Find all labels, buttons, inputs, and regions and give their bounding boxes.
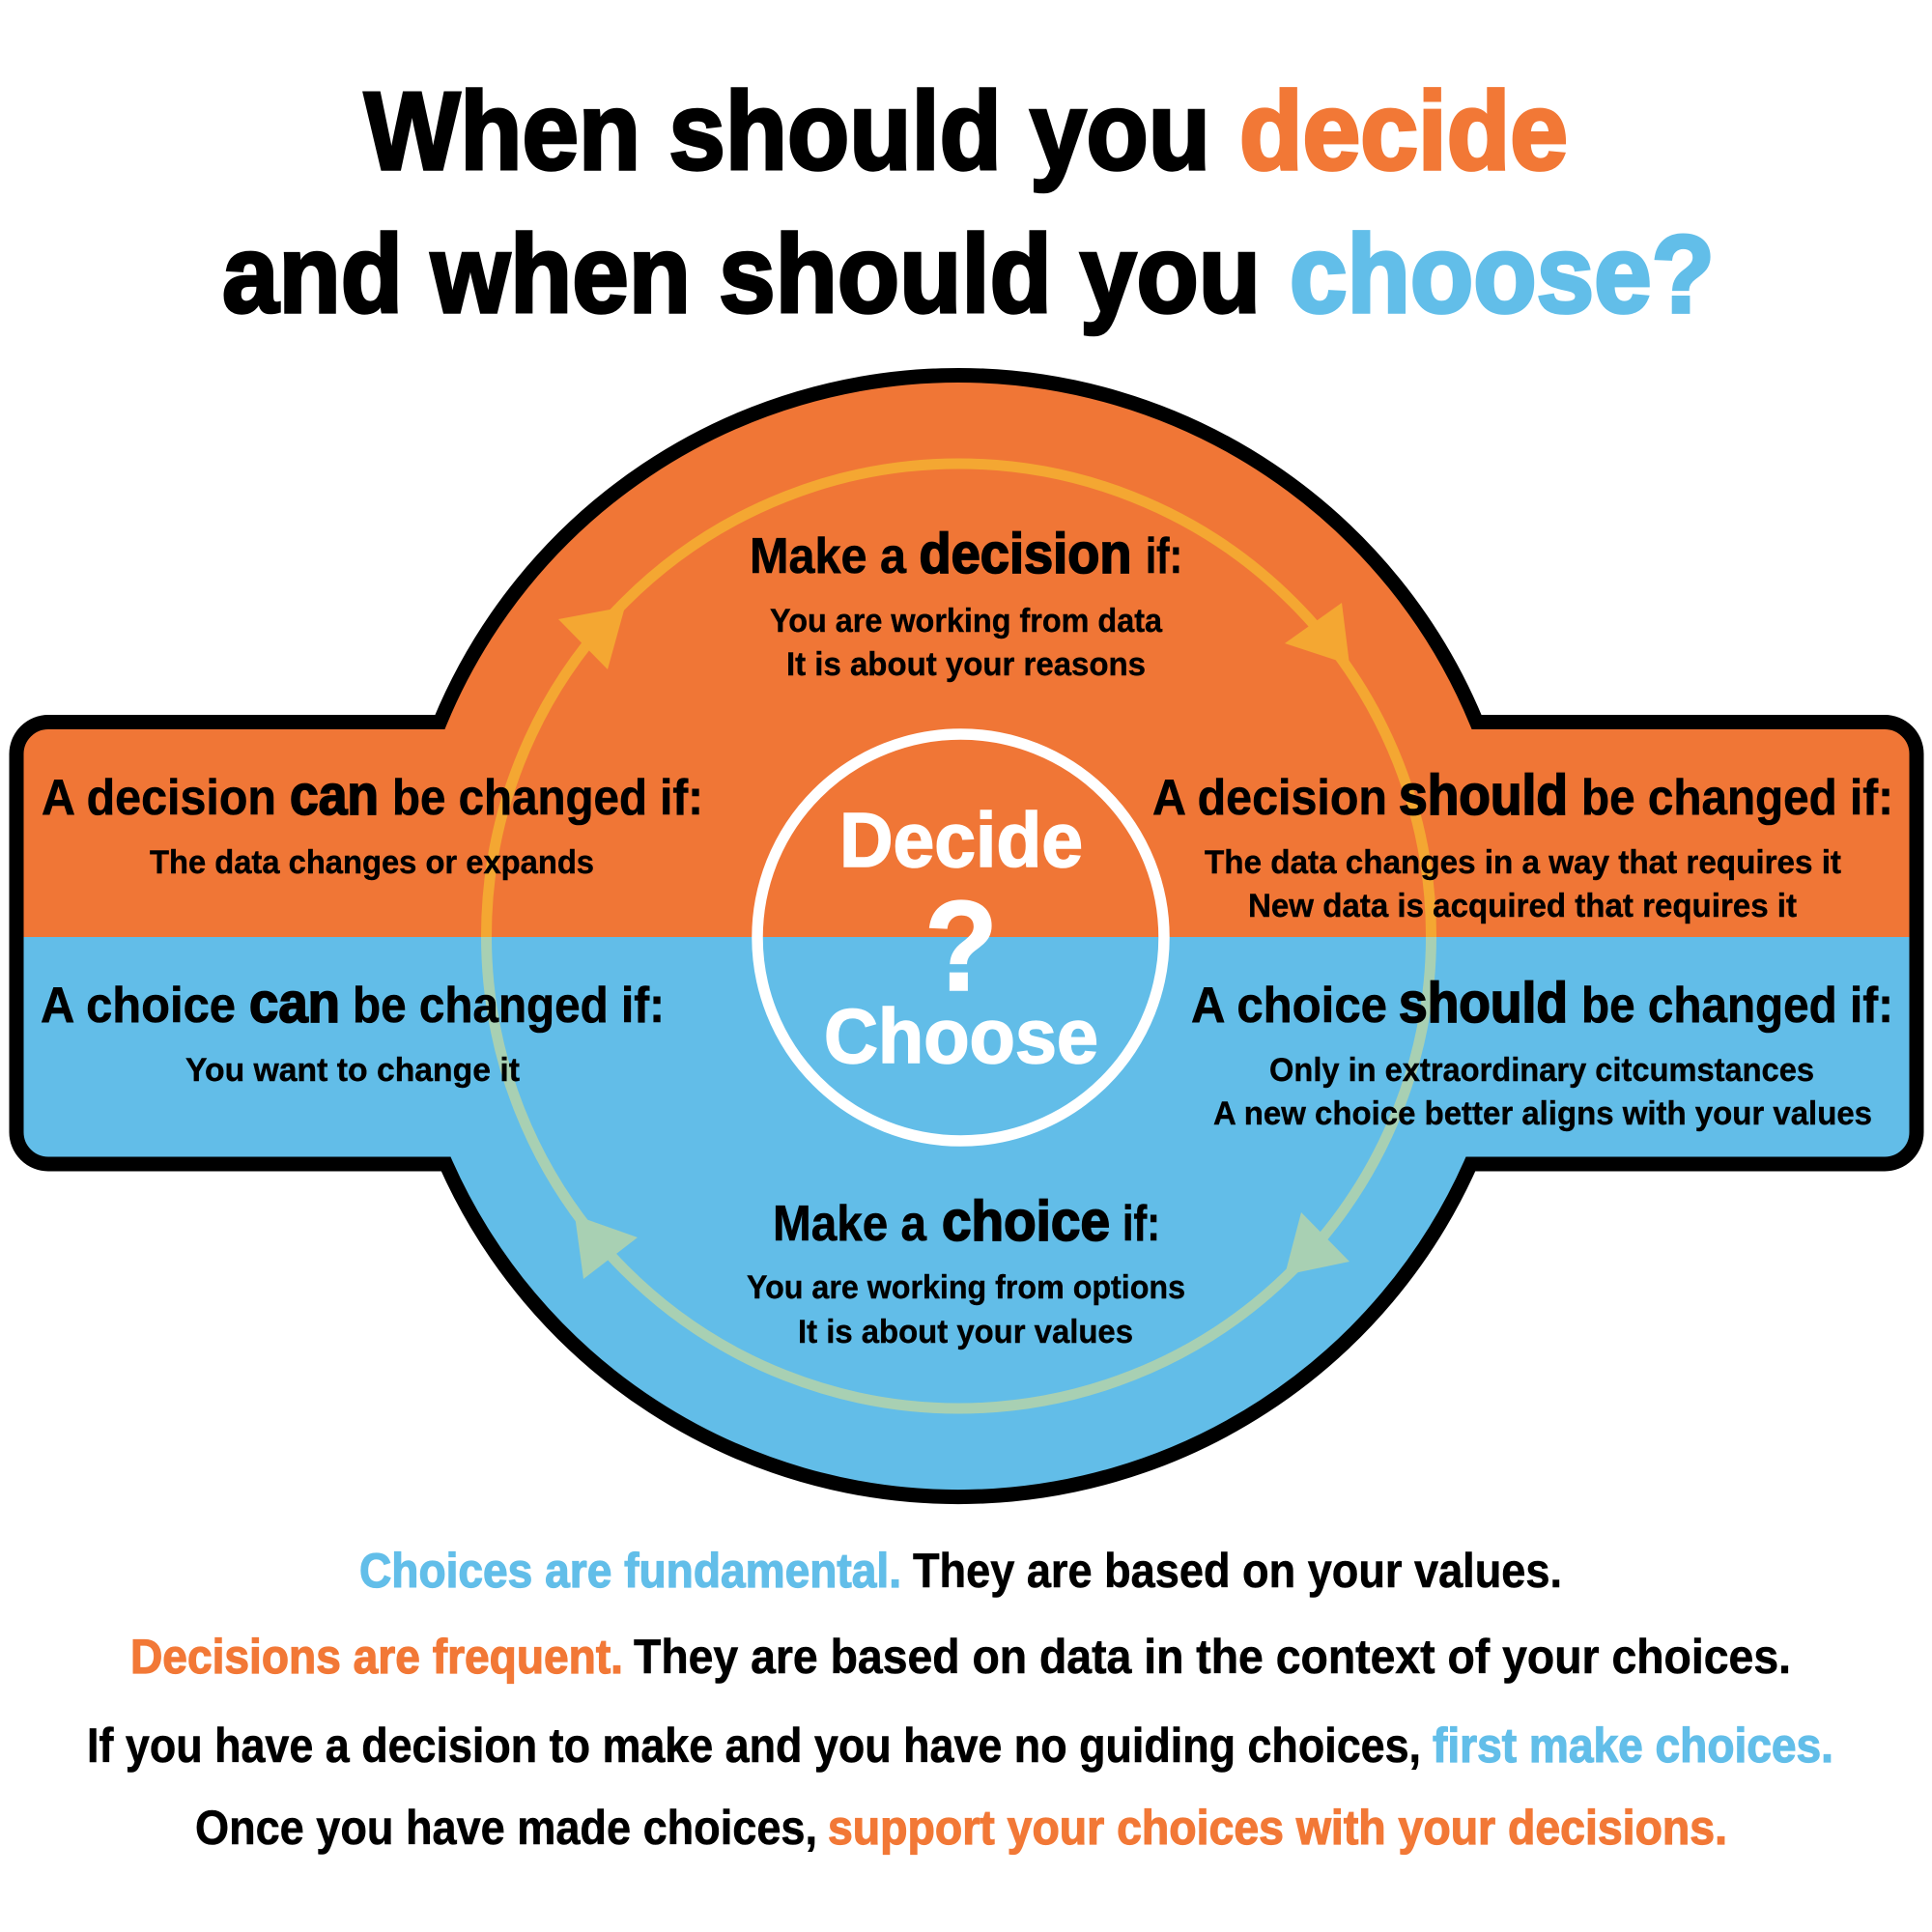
line 2: New data is acquired that requires it [1248,888,1797,924]
heading: should [1399,764,1568,827]
statement 2: Decisions are frequent. [130,1630,623,1684]
line 1: You are working from data [770,603,1163,639]
title line 2: and when should you [222,213,1261,336]
arrow: top right [1285,603,1350,665]
heading [773,1190,1160,1253]
heading [750,523,1182,585]
heading [41,972,665,1035]
heading: can [290,764,379,827]
line 2: It is about your reasons [786,646,1146,683]
line 1: The data changes or expands [150,844,594,881]
statement 4: support your choices with your decisions. [828,1801,1727,1855]
arrow: bottom left [575,1215,638,1279]
question mark: ? [924,875,998,1018]
text block: choice can be changed [41,972,665,1089]
text block: decision should be changed [1152,764,1893,924]
line 1: You want to change it [185,1052,520,1089]
heading [1191,972,1893,1035]
ring: upper orange arc [481,458,1436,937]
statement 3: If you have a decision to make and you have no guiding choices, [87,1719,1421,1773]
heading: decision [920,523,1132,585]
statement 1 [359,1544,1562,1598]
text block: choice should be changed [1191,972,1893,1132]
title line 2: choose? [1290,213,1715,336]
statement 1: Choices are fundamental. [359,1544,901,1598]
heading: be changed if: [392,770,703,826]
label: Choose: Choose [824,993,1098,1079]
statement 1: They are based on your values. [913,1544,1562,1598]
orange decide half [0,357,1932,937]
statement 2 [130,1630,1791,1684]
heading: choice [942,1190,1110,1253]
heading: be changed if: [1581,978,1893,1034]
heading: should [1399,972,1568,1035]
statement 2: They are based on data in the context of your choices. [634,1630,1791,1684]
heading [1152,764,1893,827]
statement 4 [195,1801,1727,1855]
heading: if: [1122,1196,1160,1252]
footer statements [87,1544,1833,1855]
heading: be changed if: [1581,770,1893,826]
statement 4: Once you have made choices, [195,1801,817,1855]
white ring [757,734,1164,1141]
center circle [757,734,1164,1141]
arrow: top left [558,607,625,669]
heading: A choice [41,978,236,1034]
ring: lower green arc [481,937,1436,1414]
panel: central diagram shape [0,357,1932,1517]
heading: A choice [1191,978,1387,1034]
line 1: You are working from options [747,1269,1185,1306]
heading: be changed if: [353,978,665,1034]
text block: decision can be changed [42,764,703,881]
label: Decide: Decide [839,797,1083,883]
arrow: bottom right [1285,1212,1350,1275]
cycle arrows [487,464,1432,1408]
heading: A decision [1152,770,1387,826]
heading: if: [1146,528,1182,584]
heading: Make a [773,1196,927,1252]
text block: make a decision [750,523,1182,683]
title line 1: When should you [364,71,1210,193]
statement 3: first make choices. [1433,1719,1833,1773]
line 2: It is about your values [798,1314,1133,1350]
text block: make a choice [747,1190,1185,1350]
black outline [16,375,1917,1497]
heading [42,764,703,827]
heading: can [249,972,340,1035]
title [222,71,1715,336]
heading: Make a [750,528,907,584]
line 1: Only in extraordinary citcumstances [1269,1052,1814,1089]
line 2: A new choice better aligns with your values [1213,1095,1872,1132]
heading: A decision [42,770,276,826]
blue choose half [0,937,1932,1517]
title line 1: decide [1239,71,1568,193]
line 1: The data changes in a way that requires it [1205,844,1841,881]
